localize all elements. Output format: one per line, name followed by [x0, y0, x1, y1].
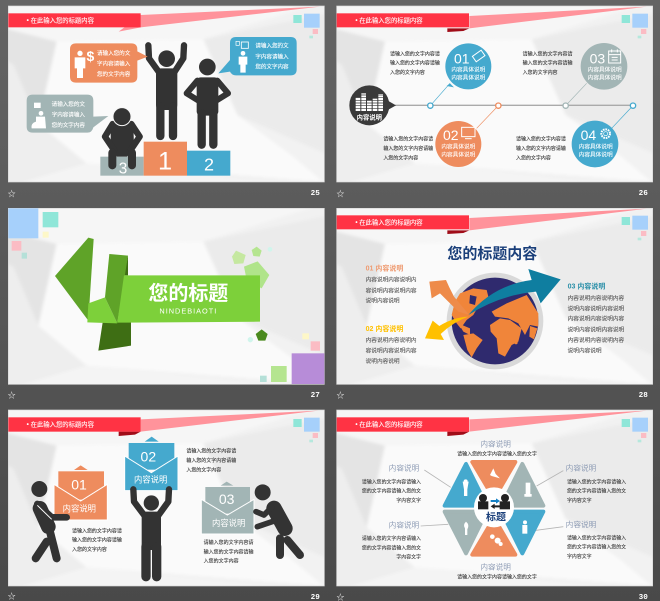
origami arrow banner [55, 238, 260, 351]
envelope 03 [201, 482, 254, 534]
text block 03: 说明内容说明 [568, 347, 602, 355]
callout: blue: 请输入您的文 [255, 42, 289, 50]
text block 02: 说明内容说明 [366, 357, 400, 365]
figure: centre, holding envelope overhead [133, 489, 169, 577]
step 04: 内容具体说明 [579, 151, 613, 159]
centre hub [474, 487, 514, 527]
label: bottom [457, 562, 537, 580]
text block 2: 请输入您的文字内容请 [186, 448, 236, 455]
step 02: 内容具体说明 [441, 151, 476, 159]
title banner: • 在此输入您的标题内容 [355, 420, 423, 429]
text block 1: 输入您的文字内容请输 [72, 537, 122, 544]
title banner: • 在此输入您的标题内容 [27, 420, 95, 429]
step 03: 内容具体说明 [588, 65, 622, 73]
arrow: yellow [425, 317, 468, 340]
text block 02: 02 内容说明 [366, 324, 403, 333]
step 02: 02 [443, 127, 459, 143]
label: lower left [362, 520, 421, 561]
callout: grey: 字内容请输入 [52, 111, 85, 119]
callout: orange: 字内容请输入 [97, 60, 131, 68]
panel: slide 26 timeline [330, 0, 659, 189]
envelope 01 [54, 465, 107, 520]
step 01: 01 [454, 50, 470, 66]
envelope 02: 内容说明 [134, 475, 167, 485]
footer: slide 27: ☆ [8, 391, 16, 400]
icon: monitor [462, 127, 475, 139]
label: lower left: 内容说明 [389, 520, 420, 530]
label: upper right [566, 463, 626, 504]
green pentagons [232, 247, 272, 342]
footer: slide 28: ☆ [336, 391, 344, 400]
title banner [337, 209, 647, 234]
text block 03: 内容说明内容说明内容 [568, 294, 625, 302]
callout: orange [70, 43, 148, 83]
label: bottom: 请输入您的文字内容请输入您的文字 [457, 573, 537, 580]
step 04: 内容具体说明 [579, 143, 613, 151]
text block 4: 入您的文字内容 [516, 154, 551, 161]
title banner [8, 7, 320, 32]
text block 1: 输入您的文字内容请输 [390, 60, 440, 67]
timeline axis [395, 83, 636, 128]
podium: 1 [158, 147, 172, 175]
text block 02 [366, 324, 417, 365]
label: lower right [566, 519, 626, 560]
step 02: 内容具体说明 [441, 143, 476, 151]
label: upper left: 内容说明 [389, 463, 420, 473]
decorative squares, top left [8, 208, 58, 259]
text block 2: 请输入您的文字内容请 [383, 136, 433, 143]
text block 2: 输入您的文字内容请输 [186, 457, 236, 464]
panel: slide 27 section title [2, 202, 331, 391]
figure: third place, head bowed [105, 108, 140, 165]
envelope 01: 内容说明 [63, 504, 96, 514]
label: top: 请输入您的文字内容请输入您的文字 [457, 450, 537, 457]
envelope 02 [125, 437, 178, 491]
label: lower left: 请输入您的文字内容请输入 [362, 535, 421, 542]
label: upper right: 字内容文字 [567, 497, 592, 504]
label: upper left: 字内容文字 [396, 497, 421, 504]
envelope 02: 02 [141, 448, 156, 464]
callout: blue: 您的文字内容 [255, 63, 289, 71]
label: top [457, 439, 537, 457]
text block 2: 输入您的文字内容请输 [383, 145, 433, 152]
icon: person with dollar: $ [86, 48, 94, 64]
text block 01: 内容说明内容说明内 [366, 276, 417, 284]
text block 03: 说明内容说明内容说明 [568, 325, 625, 333]
text block 2 [186, 448, 236, 473]
callout: blue [218, 37, 297, 75]
text block 3: 请输入您的文字内容请 [523, 50, 573, 57]
label: bottom: 内容说明 [480, 562, 511, 572]
text block 3 [523, 50, 573, 76]
step 03: 03 [590, 50, 605, 66]
text block 4: 请输入您的文字内容请 [516, 136, 566, 143]
text block 2: 入您的文字内容 [186, 466, 221, 473]
callout: orange: 请输入您的文 [97, 49, 131, 57]
text block 4 [516, 136, 566, 161]
footer: slide 26 [336, 190, 648, 199]
title banner [8, 411, 318, 436]
text block 01 [366, 264, 417, 304]
text block 03: 内容说明内容说明内容 [568, 315, 625, 323]
footer: slide 28: 28 [639, 392, 648, 400]
text block 1 [390, 50, 440, 76]
leader lines [421, 470, 563, 531]
title banner: • 在此输入您的标题内容 [355, 16, 423, 25]
title banner [337, 411, 647, 436]
text block 01: 容说明内容说明内容 [366, 286, 417, 294]
hub: dark circle with equaliser [349, 85, 396, 125]
footer: slide 25: ☆ [8, 190, 16, 199]
footer: slide 28 [336, 391, 648, 400]
label: lower right: 您的文字内容请输入您的文 [567, 544, 626, 551]
label: top: 内容说明 [480, 439, 511, 449]
text block 3: 输入您的文字内容请输 [523, 60, 573, 67]
text block 01: 说明内容说明 [366, 296, 400, 304]
hexagon icons [463, 468, 532, 546]
label: lower left: 字内容文字 [396, 554, 421, 561]
panel: slide 28 globe [330, 202, 659, 391]
footer: slide 26: ☆ [336, 190, 344, 199]
title banner: • 在此输入您的标题内容 [27, 16, 95, 25]
text block 1 [72, 527, 122, 553]
callout: grey: 请输入您的文 [52, 100, 85, 108]
figure: left, carrying envelope [31, 481, 67, 558]
label: lower right: 内容说明 [566, 519, 597, 529]
footer: slide 29: ☆ [8, 592, 16, 601]
hexagon segments [445, 462, 543, 555]
podium: 2 [204, 154, 214, 174]
panel: slide 25 podium [2, 0, 331, 189]
text block 3: 入您的文字内容 [204, 558, 239, 565]
footer: slide 27: 27 [311, 392, 320, 400]
label: upper left: 请输入您的文字内容请输入 [362, 478, 421, 485]
centre hub: 标题 [486, 511, 506, 524]
text block 1: 请输入您的文字内容请 [390, 50, 440, 57]
text block 01: 01 内容说明 [366, 264, 403, 273]
icon: person with papers [236, 41, 248, 73]
podium [100, 142, 230, 178]
step 04 [572, 121, 618, 167]
panel: slide 30 hexagon [330, 403, 659, 593]
text block 1: 入您的文字内容 [72, 546, 107, 553]
text block 03: 内容说明内容说明内容 [568, 336, 625, 344]
envelope 03: 内容说明 [212, 518, 245, 528]
figure: right, pushing envelope [255, 484, 300, 555]
label: upper left [362, 463, 421, 504]
arrow: orange [429, 280, 469, 315]
text block 03: 03 内容说明 [568, 281, 605, 290]
text block 3: 请输入您的文字内容请 [204, 539, 254, 546]
text block 03 [568, 281, 625, 355]
footer: slide 30 [336, 593, 648, 601]
panel: slide 29 envelopes [2, 403, 331, 593]
icon: two people exchanging [478, 494, 510, 509]
text block 1: 入您的文字内容 [390, 69, 425, 76]
callout: orange: 您的文字内容 [97, 70, 131, 78]
figure: winner with raised arms [148, 45, 184, 136]
hub: dark circle with equaliser: 内容说明 [357, 112, 382, 121]
footer: slide 25 [8, 190, 320, 199]
label: lower right: 字内容文字 [567, 553, 592, 560]
step 01 [445, 43, 491, 89]
envelope 01: 01 [71, 476, 87, 492]
text block 3 [204, 539, 254, 565]
icon: ticket [472, 50, 485, 62]
decorative squares, bottom right [260, 333, 324, 384]
envelope 03: 03 [219, 491, 235, 507]
title: 您的标题 [148, 282, 228, 305]
footer: slide 25: 25 [311, 190, 320, 198]
globe [447, 273, 543, 369]
figure: second place, hands on hips [187, 59, 228, 145]
icon: gear [601, 129, 610, 138]
label: upper left: 您的文字内容请输入您的文 [362, 488, 421, 495]
step 03 [581, 43, 627, 90]
label: upper right: 请输入您的文字内容请输入 [567, 478, 626, 485]
step 01: 内容具体说明 [451, 73, 486, 81]
label: lower right: 请输入您的文字内容请输入 [567, 534, 626, 541]
step 03: 内容具体说明 [588, 73, 622, 81]
title banner: • 在此输入您的标题内容 [355, 218, 423, 227]
arrow: teal [468, 269, 561, 315]
text block 2 [383, 136, 433, 161]
step 04: 04 [581, 127, 596, 143]
text block 2: 入您的文字内容 [383, 154, 418, 161]
text block 03: 说明内容说明内容说明 [568, 305, 625, 313]
footer: slide 26: 26 [639, 190, 648, 198]
callout: blue: 字内容请输入 [255, 52, 289, 60]
callout: grey [27, 95, 108, 133]
label: upper right: 您的文字内容请输入您的文 [567, 488, 626, 495]
step 01: 内容具体说明 [451, 65, 486, 73]
podium: 3 [119, 161, 127, 178]
label: upper right: 内容说明 [566, 463, 597, 473]
text block 3: 入您的文字内容 [523, 69, 558, 76]
icon: calendar [609, 49, 621, 63]
footer: slide 29 [8, 592, 320, 601]
text block 02: 内容说明内容说明内 [366, 336, 417, 344]
subtitle: NINDEBIAOTI [159, 306, 217, 315]
icon: seated person [32, 103, 46, 128]
title banner [337, 7, 647, 32]
step 02 [435, 121, 481, 167]
callout: grey: 您的文字内容 [52, 121, 85, 129]
text block 02: 容说明内容说明内容 [366, 347, 417, 355]
text block 1: 请输入您的文字内容请 [72, 527, 122, 534]
text block 4: 输入您的文字内容请输 [516, 145, 566, 152]
text block 3: 输入您的文字内容请输 [204, 548, 254, 555]
footer: slide 27 [8, 391, 320, 400]
label: lower left: 您的文字内容请输入您的文 [362, 544, 421, 551]
heading: 您的标题内容 [447, 245, 537, 263]
